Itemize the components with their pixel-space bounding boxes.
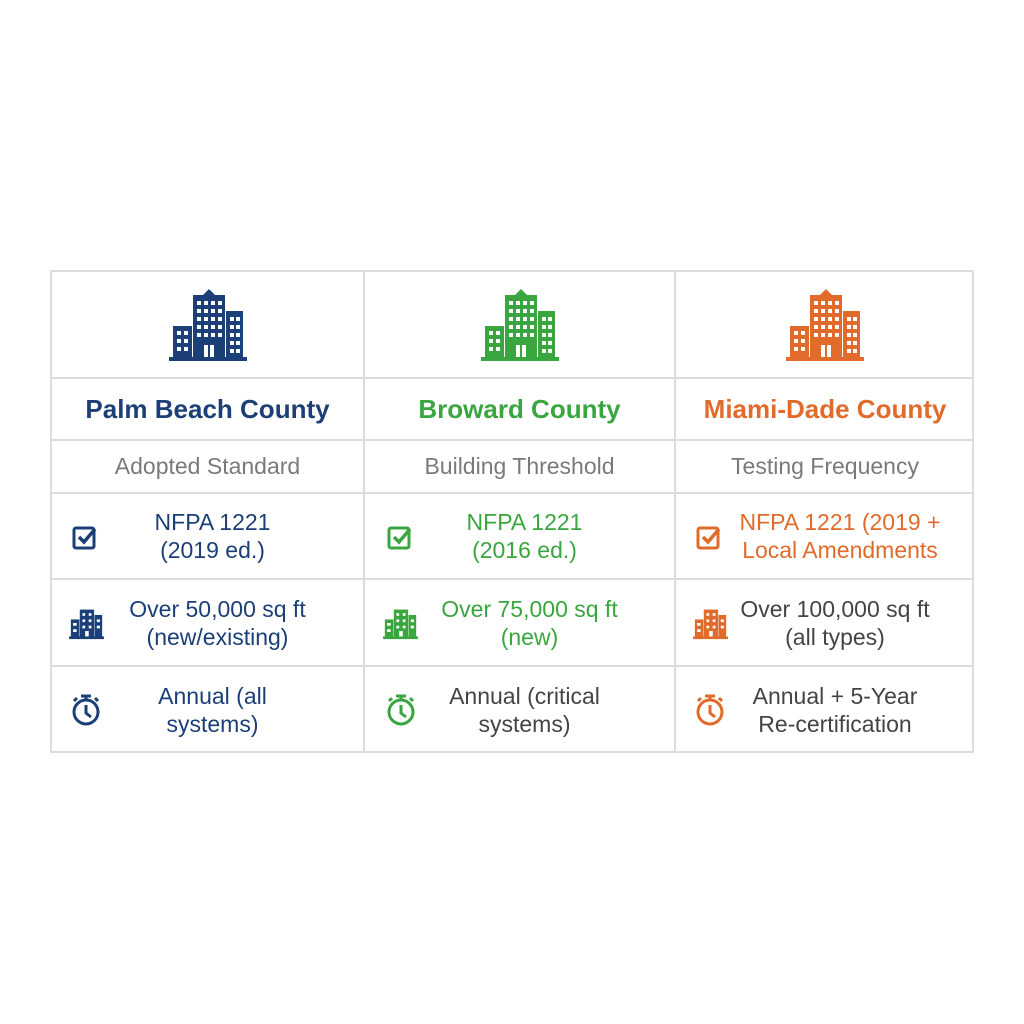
row: standard miami: NFPA 1221 (2019 + xyxy=(740,509,940,535)
row: threshold palm beach: Over 50,000 sq ft xyxy=(129,596,306,622)
row: standard broward xyxy=(365,494,676,580)
row: threshold miami: (all types) xyxy=(785,624,885,650)
comparison table xyxy=(50,270,974,753)
row: standard palm beach: NFPA 1221 xyxy=(155,509,270,535)
row: frequency broward xyxy=(365,667,676,753)
subheading: testing frequency: Testing Frequency xyxy=(731,453,919,479)
row: standard miami xyxy=(676,494,974,580)
row: standard broward: NFPA 1221 xyxy=(467,509,582,535)
icon: check xyxy=(72,526,96,550)
row: standard palm beach: (2019 ed.) xyxy=(160,537,265,563)
row: threshold palm beach xyxy=(52,580,365,667)
panel: miami-dade xyxy=(676,272,974,379)
icon: small building xyxy=(693,610,728,640)
heading: miami-dade county: Miami-Dade County xyxy=(704,394,946,424)
row: frequency broward: Annual (critical xyxy=(449,683,600,709)
row: threshold miami: Over 100,000 sq ft xyxy=(740,596,930,622)
row: threshold broward xyxy=(365,580,676,667)
heading: broward county: Broward County xyxy=(418,394,621,424)
icon: stopwatch xyxy=(388,694,414,726)
row: frequency miami: Annual + 5-Year xyxy=(753,683,917,709)
icon: building green xyxy=(481,289,559,361)
subheading: building threshold xyxy=(365,441,676,494)
row: frequency miami xyxy=(696,683,918,737)
panel: palm beach xyxy=(52,272,365,379)
row: frequency palm beach xyxy=(52,667,365,753)
row: standard miami: Local Amendments xyxy=(742,537,938,563)
icon: stopwatch xyxy=(72,694,100,726)
icon: building orange xyxy=(786,289,864,361)
row: frequency palm beach: systems) xyxy=(166,711,258,737)
subheading: adopted standard: Adopted Standard xyxy=(115,453,300,479)
panel: broward xyxy=(365,272,676,379)
heading: palm beach county: Palm Beach County xyxy=(85,394,330,424)
icon: small building xyxy=(383,610,418,640)
row: frequency miami: Re-certification xyxy=(758,711,912,737)
row: standard palm beach xyxy=(52,494,365,580)
row: frequency palm beach: Annual (all xyxy=(158,683,267,709)
subheading: building threshold: Building Threshold xyxy=(424,453,615,479)
row: threshold broward: (new) xyxy=(501,624,558,650)
row: standard broward: (2016 ed.) xyxy=(472,537,577,563)
icon: check xyxy=(388,526,412,550)
row: frequency broward: systems) xyxy=(478,711,570,737)
row: threshold broward: Over 75,000 sq ft xyxy=(441,596,618,622)
row: threshold palm beach: (new/existing) xyxy=(147,624,288,650)
icon: stopwatch xyxy=(696,694,724,726)
heading: palm beach county xyxy=(52,379,365,441)
subheading: adopted standard xyxy=(52,441,365,494)
icon: building navy xyxy=(169,289,247,361)
icon: check xyxy=(696,526,720,550)
heading: broward county xyxy=(365,379,676,441)
heading: miami-dade county xyxy=(676,379,974,441)
subheading: testing frequency xyxy=(676,441,974,494)
icon: small building xyxy=(69,610,104,640)
row: threshold miami xyxy=(676,580,974,667)
